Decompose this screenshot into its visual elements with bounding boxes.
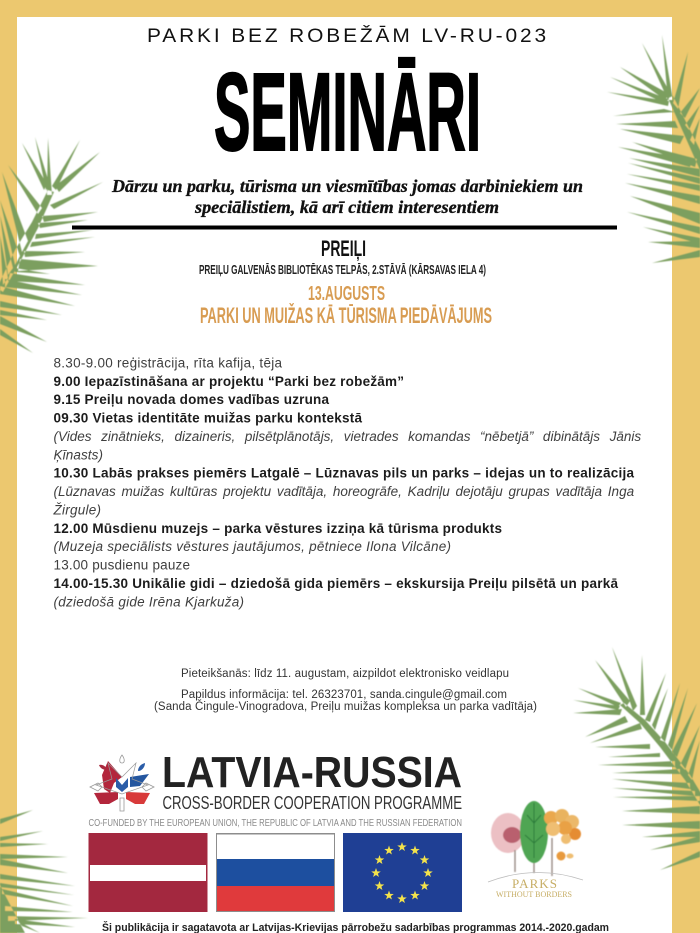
palm leaf: bottom left [0,810,88,933]
agenda: (Muzeja speciālists vēstures jautājumos, pētniece Ilona Vilcāne) [54,539,451,554]
agenda: (Lūznavas muižas kultūras projektu vadītāja, horeogrāfe, Kadriļu dejotāju grupas vadītāja Inga [54,484,635,499]
date and theme: PARKI UN MUIŽAS KĀ TŪRISMA PIEDĀVĀJUMS [200,303,492,328]
agenda: 14.00-15.30 Unikālie gidi – dziedošā gida piemērs – ekskursija Preiļu pilsētā un parkā [54,576,618,591]
ground line [488,872,583,882]
agenda: 10.30 Labās prakses piemērs Latgalē – Lūznavas pils un parks – idejas un to realizācija [54,466,634,481]
flag: Russia [216,833,335,912]
agenda: Ķīnasts) [54,447,103,462]
palm leaf: top right [607,35,700,263]
flag: Latvia [88,833,208,912]
co-funding line: CO-FUNDED BY THE EUROPEAN UNION, THE REPUBLIC OF LATVIA AND THE RUSSIAN FEDERATION [88,818,462,829]
agenda: 13.00 pusdienu pauze [54,558,190,572]
logo subtitle: CROSS-BORDER COOPERATION PROGRAMME [162,792,462,813]
agenda: 09.30 Vietas identitāte muižas parku kontekstā [54,411,362,426]
subtitle [111,176,583,217]
location heading: PREIĻI [321,236,366,261]
agenda [52,356,641,609]
subtitle: speciālistiem, kā arī citiem interesentiem [194,197,499,217]
divider rule [72,226,617,230]
programme logo block [88,748,462,912]
logo wordmark: PARKS [512,876,557,891]
subtitle: Dārzu un parku, tūrisma un viesmītības jomas darbiniekiem un [111,176,583,196]
project title: PARKI BEZ ROBEŽĀM LV-RU-023 [147,25,549,47]
registration and contact info: Pieteikšanās: līdz 11. augustam, aizpildot elektronisko veidlapu [181,668,509,680]
agenda: 9.00 Iepazīstināšana ar projektu “Parki bez robežām” [54,374,404,389]
agenda: 12.00 Mūsdienu muzejs – parka vēstures izziņa kā tūrisma produkts [54,521,502,536]
palm leaf: left [0,137,103,353]
logo wordmark: WITHOUT BORDERS [496,890,572,899]
agenda: (dziedošā gide Irēna Kjarkuža) [54,594,244,609]
agenda: (Vides zinātnieks, dizaineris, pilsētplānotājs, vietrades komandas “nēbetjā” dibinātājs Jānis [54,429,641,444]
icon: three trees [491,801,581,876]
agenda: 9.15 Preiļu novada domes vadības uzruna [54,392,329,407]
date and theme: 13.AUGUSTS [308,283,385,305]
logo wordmark [496,876,572,899]
registration and contact info [154,668,537,713]
parks without borders logo [488,801,583,899]
agenda: 8.30-9.00 reģistrācija, rīta kafija, tēja [54,356,282,370]
logo title: LATVIA-RUSSIA [162,748,462,797]
registration and contact info: (Sanda Čingule-Vinogradova, Preiļu muižas kompleksa un parka vadītāja) [154,700,537,713]
registration and contact info: Papildus informācija: tel. 26323701, sanda.cingule@gmail.com [181,689,507,701]
venue address: PREIĻU GALVENĀS BIBLIOTĒKAS TELPĀS, 2.STĀVĀ (KĀRSAVAS IELA 4) [199,262,486,277]
palm leaf: bottom right [573,647,700,870]
flag: European Union [343,833,462,912]
icon: programme maple-leaf emblem [90,755,154,811]
agenda: Žirgule) [52,502,101,517]
date and theme [200,283,492,328]
